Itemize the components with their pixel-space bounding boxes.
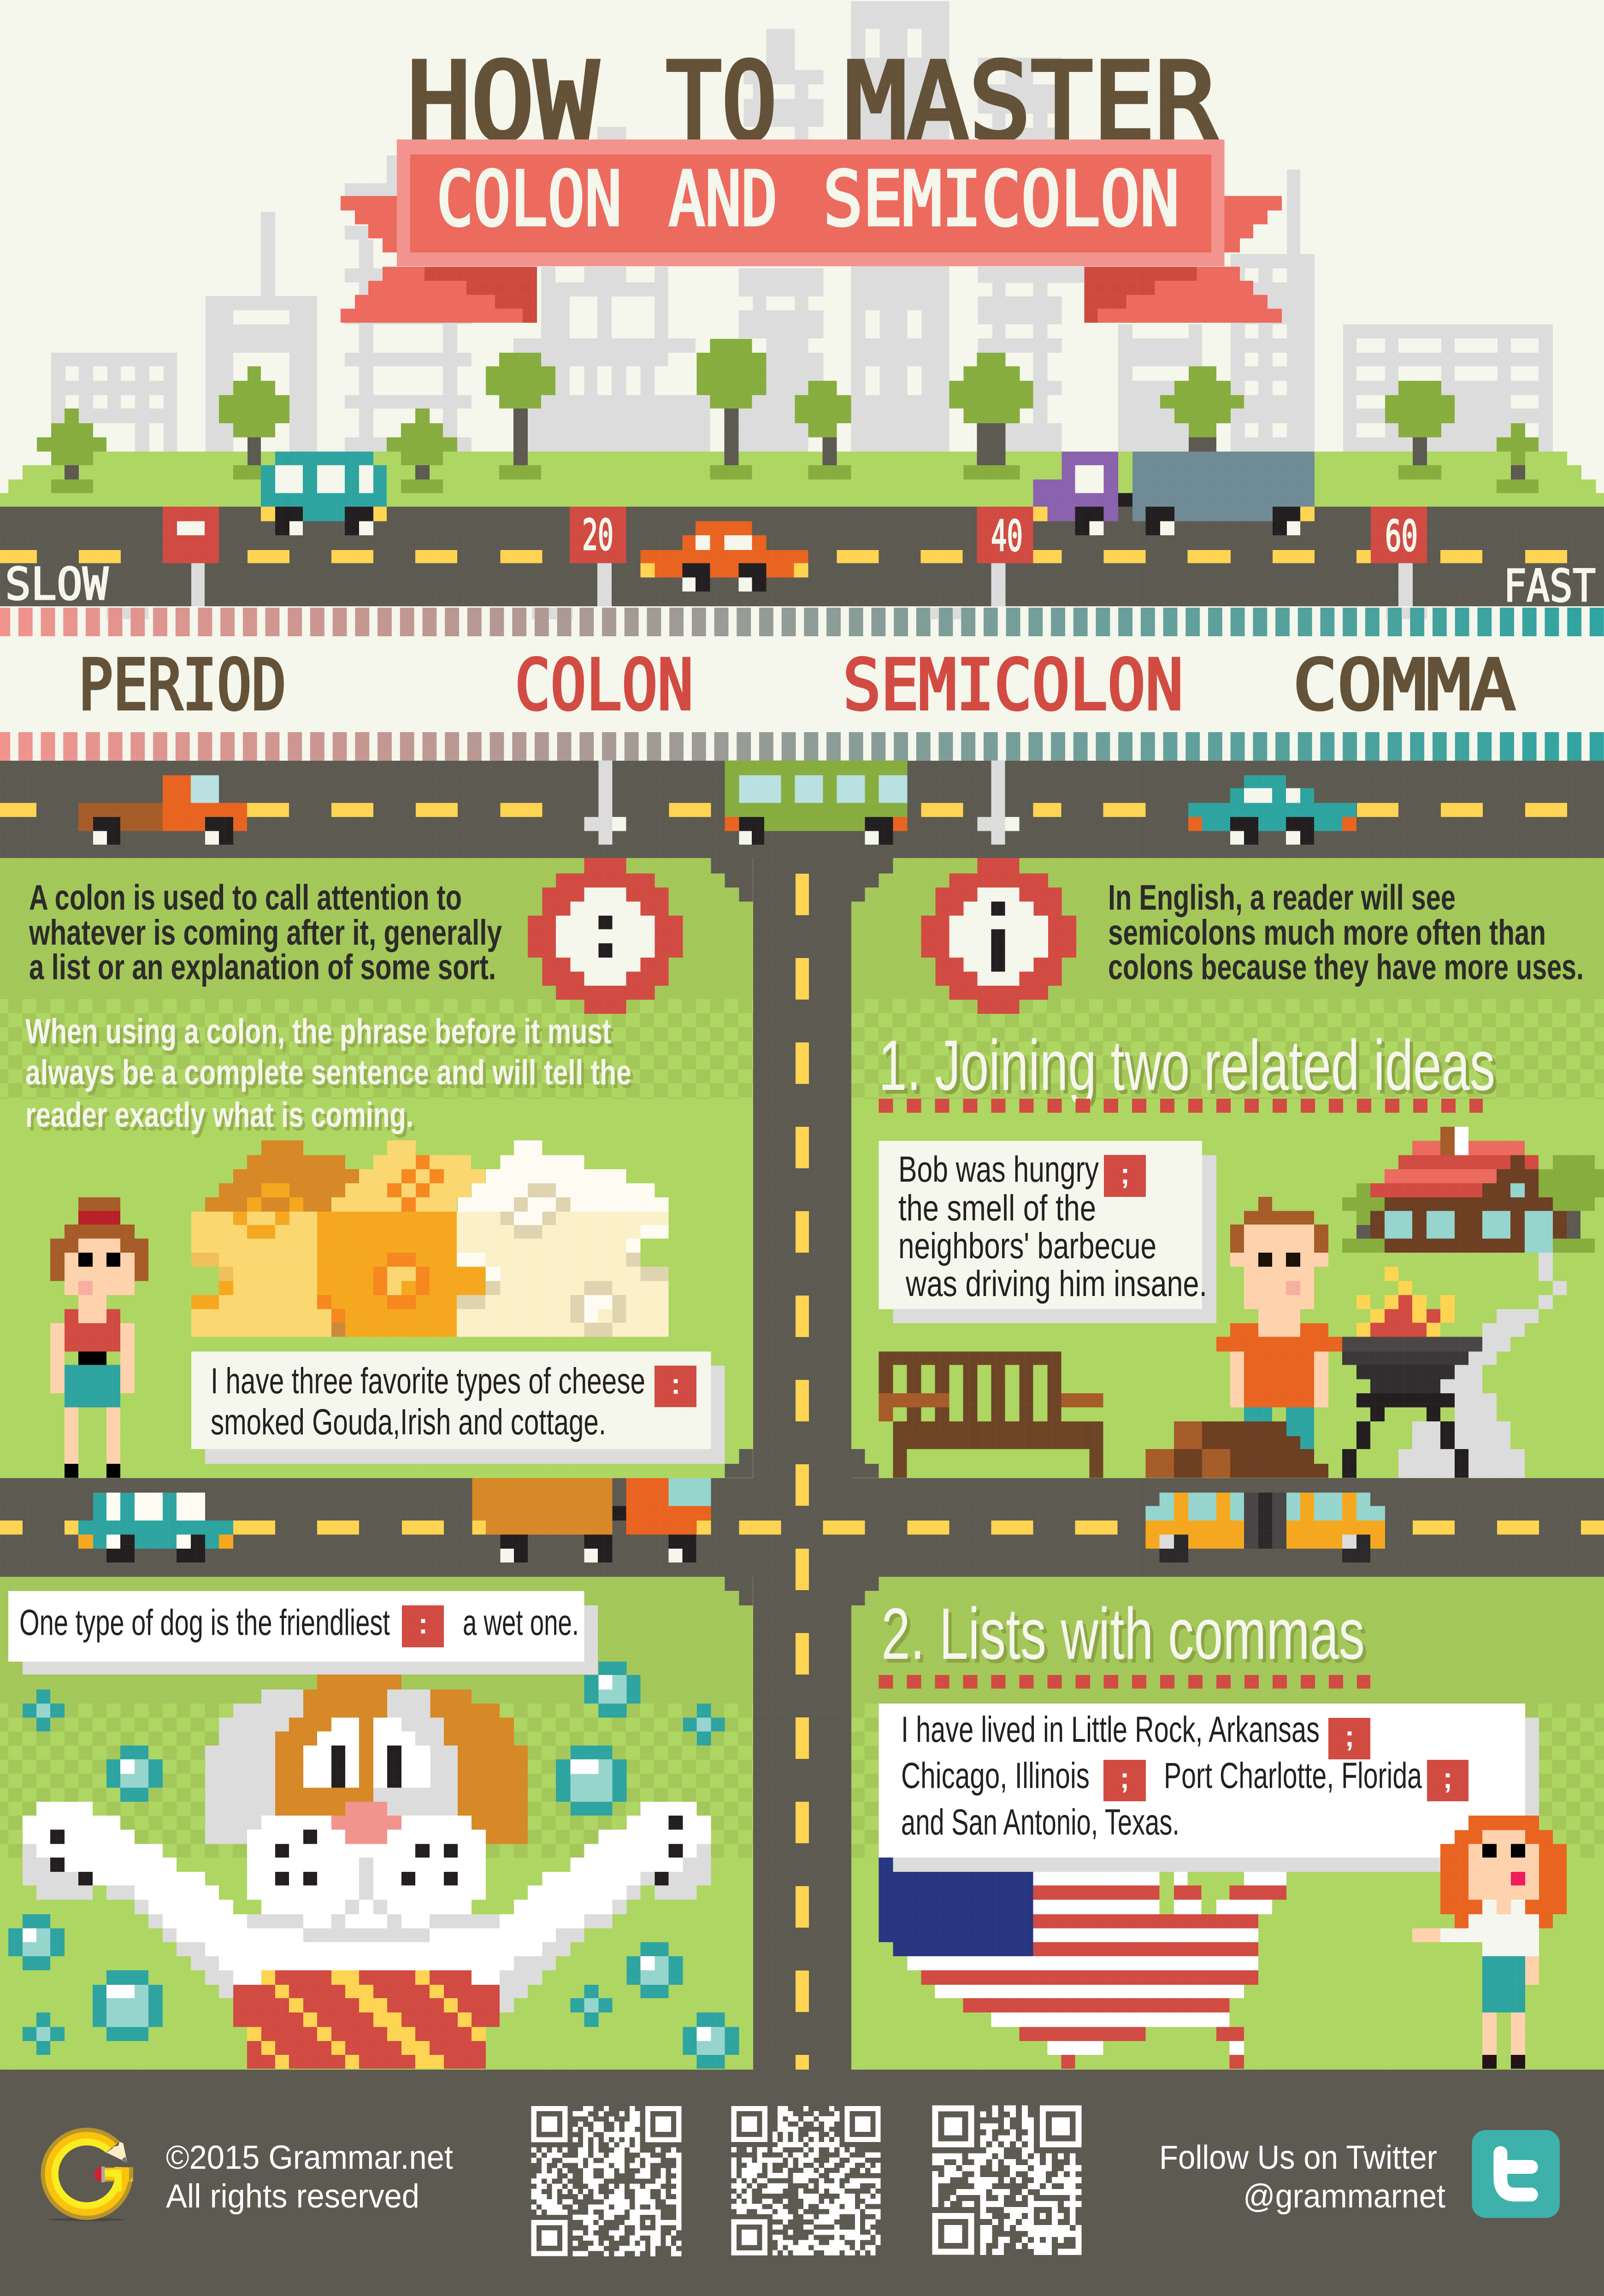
- rule text: complete sentence: always be a complete sentence and will tell the: [25, 1053, 631, 1092]
- icon: twitter: [1472, 2130, 1560, 2218]
- gradient stripes bottom: [0, 732, 1604, 761]
- callout: dog example: One type of dog is the friendliest: [19, 1602, 390, 1643]
- label: period: PERIOD: [78, 645, 286, 726]
- callout: barbecue example: [879, 1141, 1216, 1323]
- copyright text: [166, 2139, 453, 2215]
- callout: cheese example: smoked Gouda,Irish and cottage.: [211, 1401, 606, 1442]
- callout: barbecue example: ;: [1120, 1158, 1130, 1190]
- label: semicolon: SEMICOLON: [843, 645, 1183, 726]
- twitter follow text: [1159, 2139, 1445, 2215]
- QR code 3: [932, 2106, 1082, 2255]
- vehicle: articulated school bus: [1146, 1492, 1385, 1562]
- vehicle: purple truck: [1033, 452, 1315, 535]
- grass hill: [0, 452, 1604, 507]
- heading: lists with commas: 2. Lists with commas: [881, 1593, 1365, 1675]
- banner ribbon: [341, 140, 1282, 323]
- rule text: complete sentence: [25, 1012, 631, 1135]
- speed sign: 60: 60: [1385, 511, 1418, 561]
- copyright text: All rights reserved: [166, 2178, 419, 2215]
- twitter follow text: Follow Us on Twitter: [1159, 2139, 1437, 2176]
- speed sign: 60: [1371, 507, 1427, 606]
- road network: [0, 761, 1604, 2296]
- illustration: house: [1342, 1127, 1604, 1253]
- callout: lists example: ;: [1345, 1721, 1354, 1752]
- callout: cheese example: I have three favorite types of cheese: [211, 1360, 645, 1401]
- illustration: cheese: [191, 1140, 668, 1337]
- copyright text: ©2015 Grammar.net: [166, 2139, 453, 2176]
- vehicle: teal car 2: [78, 1492, 233, 1562]
- character: girl: [50, 1197, 148, 1478]
- title: HOW TO MASTER: HOW: [407, 40, 599, 165]
- speed sign: 20: [570, 507, 626, 606]
- QR code 2: [731, 2106, 881, 2255]
- speed sign: 40: [977, 507, 1033, 606]
- trees: [37, 339, 1539, 493]
- road 3 lane dashes: [0, 1521, 1604, 1535]
- callout: barbecue example: neighbors' barbecue: [898, 1225, 1156, 1266]
- illustration: smoke: [1398, 1253, 1567, 1478]
- callout: lists example: [879, 1704, 1539, 1872]
- speed sign: 40: 40: [991, 511, 1023, 561]
- footer band: [0, 2070, 1604, 2296]
- speed sign: slow: [163, 507, 219, 606]
- vehicle: orange truck: [472, 1478, 711, 1562]
- vehicle: orange car: [640, 521, 808, 592]
- banner title text: SEMICOLON: [823, 156, 1179, 243]
- panel: semicolon definition: [851, 858, 1604, 1478]
- illustration: grill with flames: [1342, 1267, 1482, 1478]
- character: man: [1216, 1197, 1342, 1449]
- character: woman: [1412, 1816, 1567, 2069]
- callout: barbecue example: the smell of the: [898, 1187, 1096, 1228]
- intro text: semicolon: [1108, 878, 1584, 987]
- speed sign: 20: 20: [582, 510, 613, 560]
- vertical road lane dashes: [796, 874, 809, 2070]
- panel: colon definition: [0, 858, 753, 1478]
- banner title text: COLON: [436, 156, 622, 243]
- callout: barbecue example: Bob was hungry: [898, 1148, 1099, 1189]
- callout: lists example: ;: [1120, 1763, 1129, 1794]
- intro text: colon: [29, 878, 502, 987]
- panel: dog example: [0, 1577, 753, 2070]
- QR code 1: [531, 2106, 681, 2256]
- twitter follow text: @grammarnet: [1243, 2178, 1445, 2215]
- callout: dog example: :: [419, 1608, 428, 1640]
- intro text: colon: A colon is used to call attention to: [29, 878, 462, 917]
- title: HOW TO MASTER: [407, 40, 1217, 165]
- illustration: log pile: [1146, 1421, 1328, 1478]
- title: HOW TO MASTER: MASTER: [845, 40, 1217, 165]
- illustration: bench: [879, 1351, 1103, 1478]
- illustration: dog: [23, 1675, 711, 2069]
- callout: dog example: [8, 1591, 598, 1675]
- vehicle: teal car: [1188, 775, 1356, 845]
- vehicle: green bus: [725, 760, 908, 845]
- gradient stripes top: [0, 608, 1604, 636]
- callout: dog example: a wet one.: [463, 1602, 579, 1643]
- road 2 lane dashes and posts: [0, 760, 1567, 845]
- panel: lists with commas: [851, 1577, 1604, 2070]
- callout: barbecue example: was driving him insane.: [905, 1263, 1207, 1304]
- icon: semicolon sign: [921, 858, 1076, 1014]
- title: HOW TO MASTER: TO: [666, 40, 777, 165]
- lane dash at footer edge: [796, 2059, 809, 2070]
- callout: lists example: ;: [1443, 1763, 1452, 1794]
- dotted underline: [879, 1675, 1370, 1689]
- callout: lists example: Chicago, Illinois: [901, 1755, 1090, 1796]
- rule text: complete sentence: When using a colon, the phrase before it must: [25, 1012, 611, 1051]
- label: comma: COMMA: [1293, 645, 1516, 726]
- banner title text: [436, 156, 1179, 243]
- rule text: complete sentence: reader exactly what is coming.: [25, 1095, 413, 1135]
- callout: lists example: and San Antonio, Texas.: [901, 1801, 1179, 1842]
- callout: cheese example: [191, 1351, 725, 1464]
- intro text: semicolon: In English, a reader will see: [1108, 878, 1456, 917]
- illustration: water drops: [8, 1662, 739, 2069]
- logo: grammar pencil G: [41, 2128, 138, 2221]
- intro text: colon: whatever is coming after it, generally: [29, 913, 502, 953]
- icon: colon sign: [528, 858, 683, 1014]
- vehicle: teal bus: [261, 452, 387, 535]
- label: colon: COLON: [515, 645, 693, 726]
- banner title text: AND: [669, 156, 778, 243]
- callout: cheese example: :: [671, 1368, 680, 1400]
- vehicle: pickup truck: [78, 775, 247, 845]
- top road: [0, 507, 1604, 606]
- callout: lists example: I have lived in Little Rock, Arkansas: [901, 1709, 1320, 1750]
- label: slow: SLOW: [5, 558, 108, 610]
- city skyline buildings: [51, 1, 1553, 452]
- dotted underline: [879, 1099, 1483, 1113]
- intro text: colon: a list or an explanation of some sort.: [29, 947, 496, 987]
- illustration: american flag map: [879, 1858, 1286, 2069]
- callout: lists example: Port Charlotte, Florida: [1164, 1755, 1422, 1796]
